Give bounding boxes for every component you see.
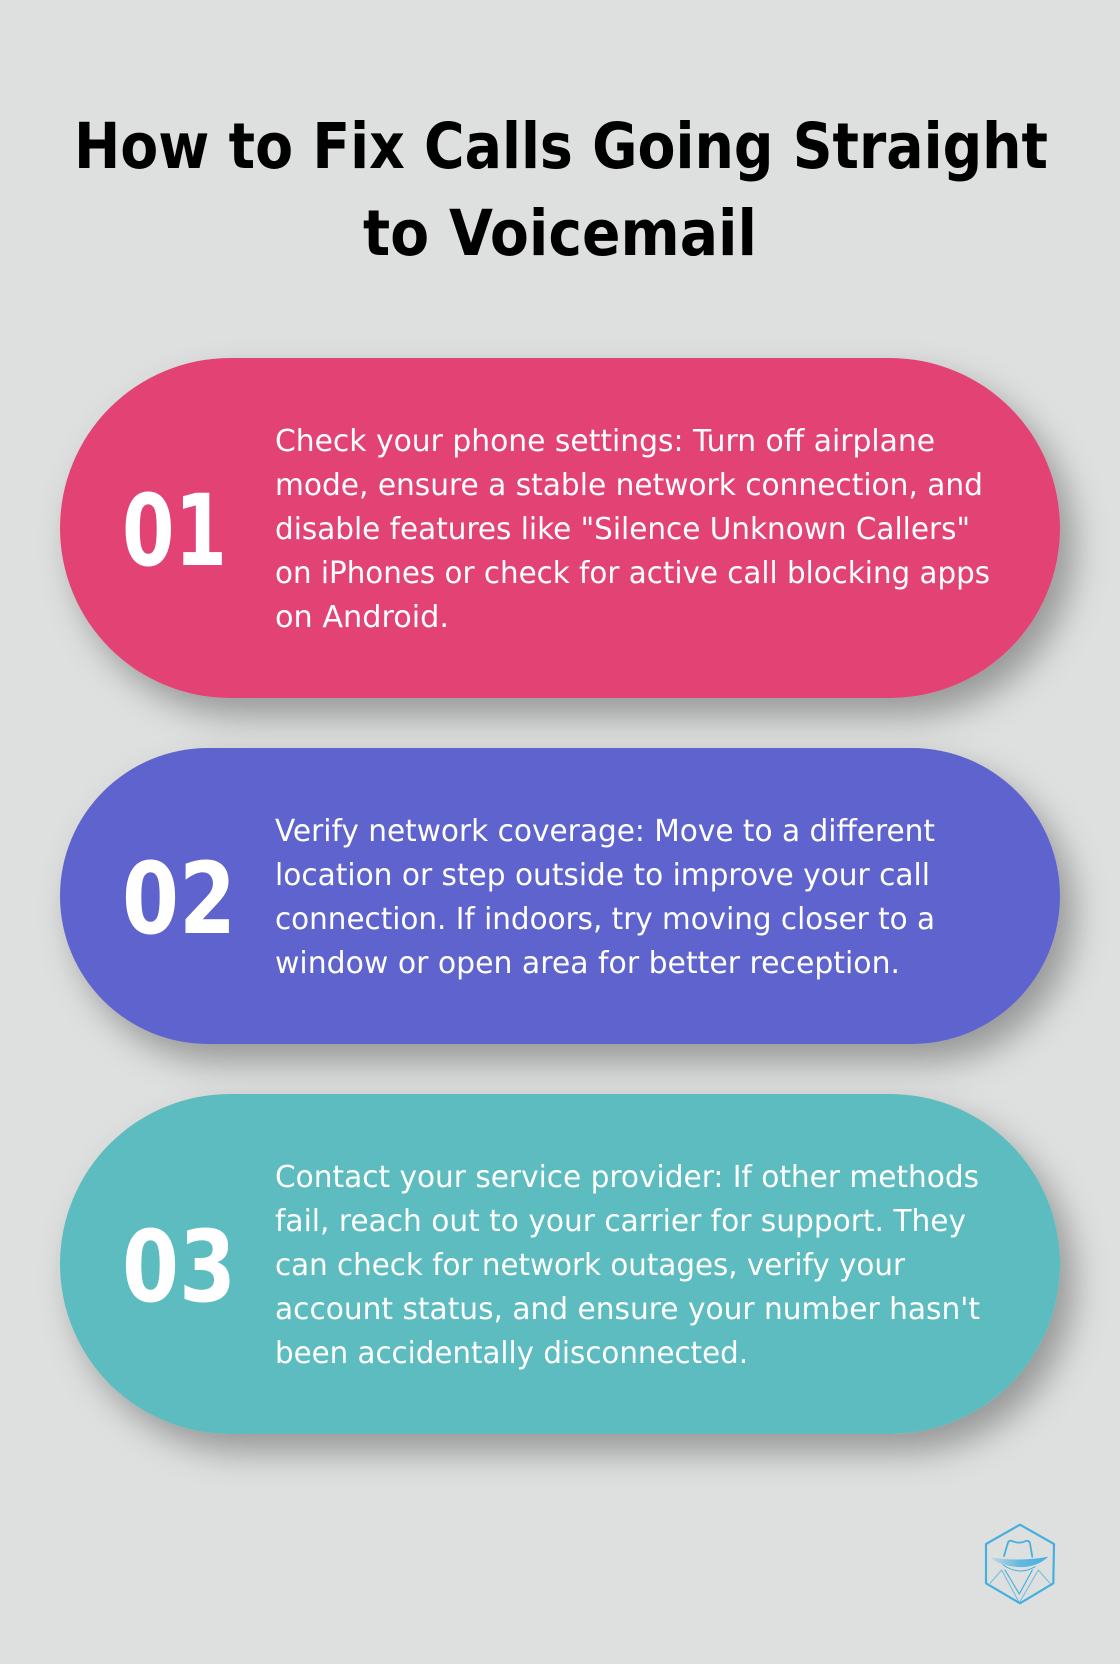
pill background teal — [60, 1094, 1060, 1434]
text block: contact service provider: been accidentally disconnected. — [275, 1336, 748, 1371]
text block: contact service provider: fail, reach out to your carrier for support. They — [275, 1204, 966, 1239]
icon: hexagon spy logo — [986, 1525, 1054, 1603]
text block: verify network coverage: window or open area for better reception. — [275, 946, 900, 981]
text block: check phone settings: on iPhones or check for active call blocking apps — [275, 556, 990, 591]
text block: check phone settings — [275, 424, 990, 635]
text block: check phone settings: on Android. — [275, 600, 449, 635]
number 03: 03 — [122, 1210, 236, 1325]
pill background purple — [60, 748, 1060, 1044]
text block: verify network coverage: connection. If indoors, try moving closer to a — [275, 902, 935, 937]
text block: verify network coverage — [275, 814, 935, 981]
text block: contact service provider: account status, and ensure your number hasn't — [275, 1292, 980, 1327]
number 02: 02 — [122, 842, 236, 957]
text block: contact service provider: Contact your service provider: If other methods — [275, 1160, 979, 1195]
title: to Voicemail — [363, 197, 757, 270]
panel: step 03 — [60, 1094, 1060, 1434]
number 01: 01 — [122, 474, 227, 589]
text block: check phone settings: mode, ensure a stable network connection, and — [275, 468, 983, 503]
text block: verify network coverage: Verify network coverage: Move to a different — [275, 814, 935, 849]
pill background pink — [60, 358, 1060, 698]
panel: step 02 — [60, 748, 1060, 1044]
text block: check phone settings: disable features like "Silence Unknown Callers" — [275, 512, 970, 547]
text block: verify network coverage: location or step outside to improve your call — [275, 858, 930, 893]
text block: contact service provider: can check for network outages, verify your — [275, 1248, 906, 1283]
title — [74, 110, 1048, 270]
panel: step 01 — [60, 358, 1060, 698]
text block: contact service provider — [275, 1160, 980, 1371]
text block: check phone settings: Check your phone settings: Turn off airplane — [275, 424, 935, 459]
